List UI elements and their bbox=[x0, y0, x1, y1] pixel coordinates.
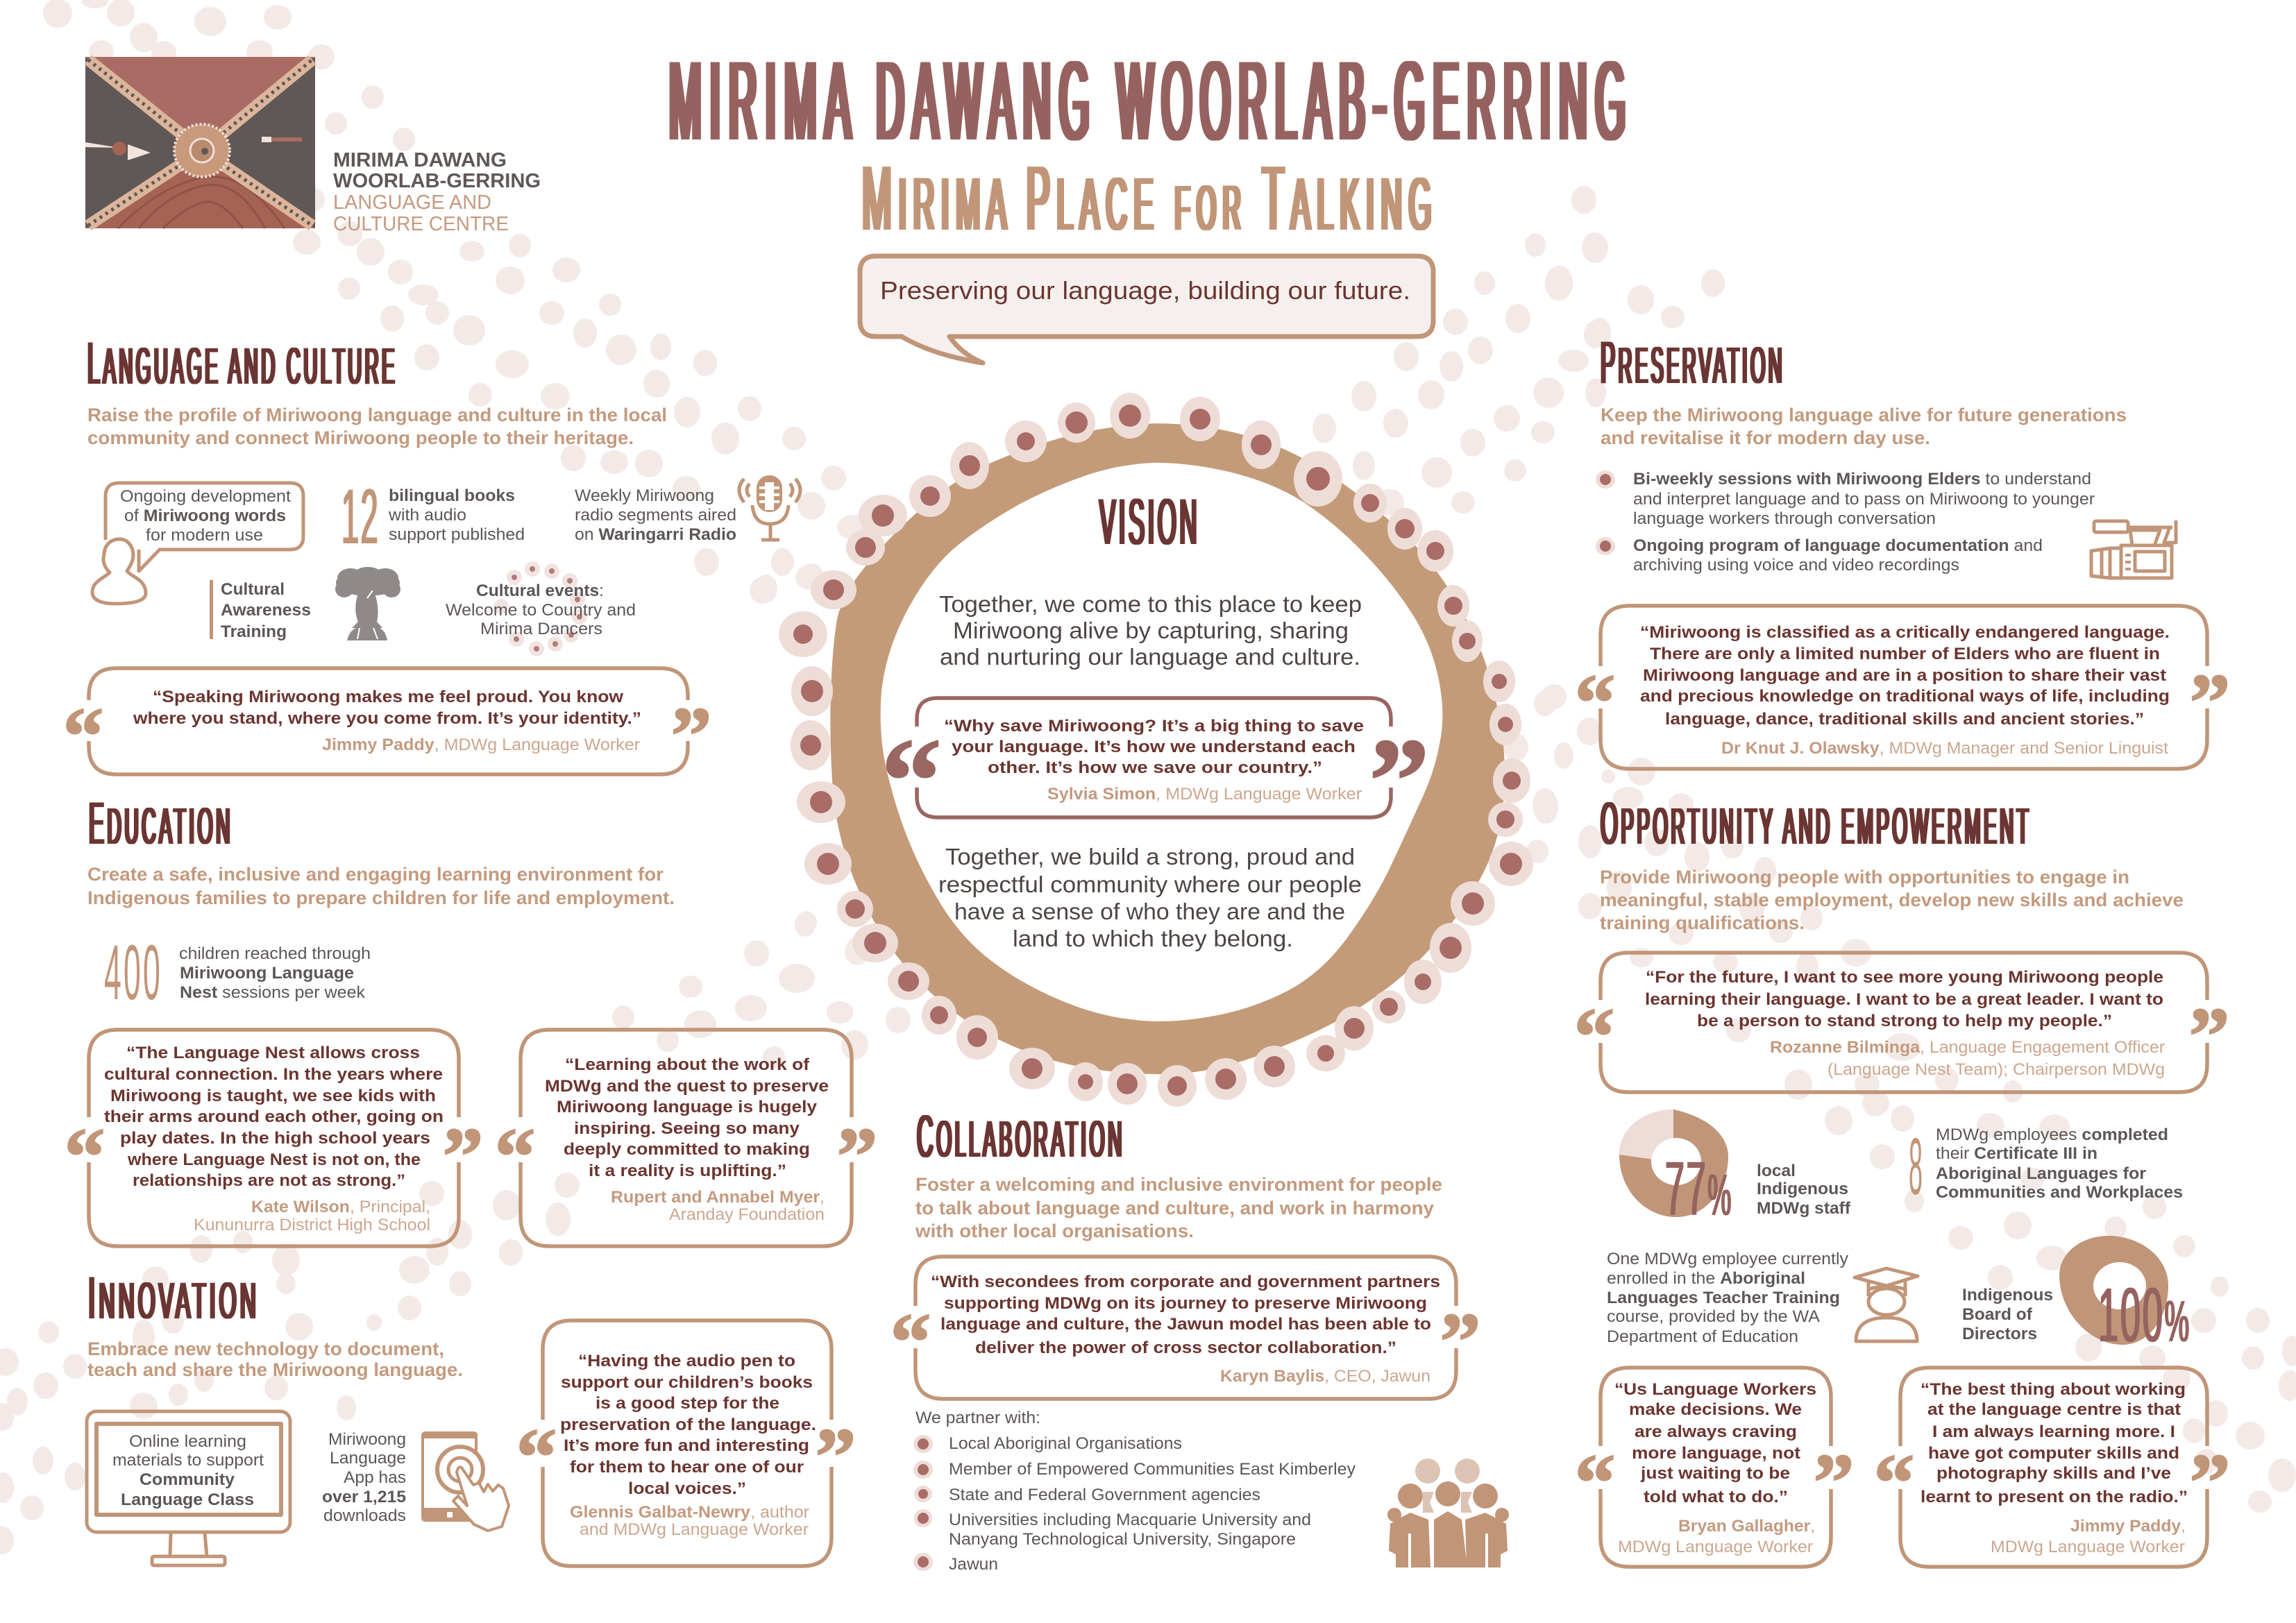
quote: Glennis Galbat-Newry: ” bbox=[815, 1411, 856, 1502]
panel: collaboration: COLLABORATION bbox=[917, 1103, 1125, 1170]
app text: downloads bbox=[323, 1506, 406, 1525]
quote: Kate Wilson: Kununurra District High School bbox=[194, 1216, 430, 1234]
app text: Miriwoong bbox=[328, 1430, 406, 1449]
subtitle: MIRIMA PLACE FOR TALKING bbox=[862, 147, 1438, 249]
stat text: board bbox=[1962, 1286, 2053, 1343]
stat text: board: Directors bbox=[1962, 1325, 2037, 1343]
bullet list bbox=[1596, 470, 2095, 575]
quote: Bryan Gallagher: “Us Language Workers bbox=[1614, 1380, 1816, 1399]
vision statement one: and nurturing our language and culture. bbox=[940, 644, 1360, 670]
vision quote: your language. It’s how we understand each bbox=[952, 738, 1356, 756]
donut chart: 100%: 100% bbox=[2098, 1273, 2191, 1358]
quote: Jimmy Paddy: where you stand, where you come from. It’s your identity.” bbox=[133, 709, 641, 728]
vision statement two: Together, we build a strong, proud and bbox=[945, 844, 1355, 869]
quote: Kate Wilson: relationships are not as strong.” bbox=[133, 1171, 405, 1190]
quote: Rupert and Annabel Myer: Miriwoong language is hugely bbox=[557, 1098, 818, 1116]
quote: Karyn Baylis: ” bbox=[1440, 1296, 1481, 1387]
cultural awareness training: Awareness bbox=[221, 601, 311, 620]
quote: Glennis Galbat-Newry: support our children’s books bbox=[561, 1373, 813, 1392]
quote: Dr Knut J. Olawsky bbox=[1574, 606, 2231, 769]
donut chart: 77% bbox=[1619, 1110, 1733, 1232]
quote: Jimmy Paddy: I am always learning more. I bbox=[1932, 1422, 2175, 1441]
quote: Jimmy Paddy: learnt to present on the radio.” bbox=[1921, 1488, 2188, 1506]
aim: Provide Miriwoong people with opportunities to engage in bbox=[1600, 867, 2129, 887]
panel: preservation bbox=[1574, 330, 2231, 769]
aim bbox=[87, 1339, 463, 1380]
quote: Dr Knut J. Olawsky: Dr Knut J. Olawsky , MDWg Manager and Senior Linguist bbox=[1721, 739, 2168, 758]
stat text: Miriwoong Language bbox=[180, 964, 354, 983]
stat text: staff bbox=[1757, 1162, 1851, 1218]
partner list: We partner with: bbox=[915, 1409, 1040, 1427]
aim bbox=[87, 864, 675, 908]
teacher training text: One MDWg employee currently bbox=[1607, 1250, 1848, 1268]
partner list: State and Federal Government agencies bbox=[949, 1486, 1260, 1504]
quote: Kate Wilson: “ bbox=[64, 1111, 105, 1202]
panel: opportunity and empowerment: 8 bbox=[1909, 1121, 1923, 1212]
aim: to talk about language and culture, and work in harmony bbox=[915, 1198, 1434, 1218]
bullet list: archiving using voice and video recordings bbox=[1633, 556, 1959, 575]
teacher training text: Languages Teacher Training bbox=[1607, 1289, 1840, 1307]
quote: Jimmy Paddy: have got computer skills and bbox=[1928, 1444, 2179, 1463]
quote: Rupert and Annabel Myer: it a reality is uplifting.” bbox=[589, 1162, 786, 1180]
quote: Karyn Baylis: “With secondees from corporate and government partners bbox=[931, 1273, 1440, 1291]
aim: meaningful, stable employment, develop new skills and achieve bbox=[1600, 890, 2184, 910]
icon: graduate bbox=[1855, 1268, 1918, 1341]
tagline speech bubble bbox=[860, 256, 1433, 363]
stat text: books: bilingual books bbox=[389, 486, 515, 505]
aim bbox=[87, 405, 667, 448]
quote: Bryan Gallagher: told what to do.” bbox=[1644, 1488, 1788, 1506]
quote: Dr Knut J. Olawsky: There are only a limited number of Elders who are fluent in bbox=[1650, 645, 2160, 663]
quote: Kate Wilson: ” bbox=[443, 1111, 483, 1202]
vision statement two bbox=[938, 844, 1362, 951]
teacher training text: enrolled in the Aboriginal bbox=[1607, 1269, 1805, 1288]
quote: Dr Knut J. Olawsky: language, dance, traditional skills and ancient stories.” bbox=[1665, 710, 2144, 729]
quote: Rozanne Bilminga bbox=[1574, 953, 2229, 1092]
icon: group of people bbox=[1387, 1459, 1509, 1567]
panel: innovation: INNOVATION bbox=[88, 1265, 260, 1332]
quote: Glennis Galbat-Newry: and MDWg Language Worker bbox=[580, 1520, 809, 1539]
quote: Jimmy Paddy bbox=[1874, 1368, 2231, 1567]
cultural events: Cultural events: bbox=[476, 581, 604, 600]
vision statement two: land to which they belong. bbox=[1013, 926, 1293, 951]
vision statement two: respectful community where our people bbox=[938, 872, 1362, 897]
quote: Bryan Gallagher bbox=[1574, 1368, 1855, 1567]
aim: Embrace new technology to document, bbox=[87, 1339, 444, 1359]
quote: Kate Wilson bbox=[64, 1030, 483, 1246]
logo bbox=[85, 57, 315, 228]
quote: Dr Knut J. Olawsky: and precious knowledge on traditional ways of life, including bbox=[1640, 687, 2170, 706]
panel: language and culture: LANGUAGE AND CULTURE bbox=[87, 330, 398, 397]
quote: Glennis Galbat-Newry: It’s more fun and interesting bbox=[564, 1436, 809, 1455]
stat text bbox=[179, 944, 371, 1002]
aim bbox=[1601, 405, 2127, 448]
stat text: board: Indigenous bbox=[1962, 1286, 2053, 1305]
icon: microphone bbox=[739, 475, 800, 540]
aim: Raise the profile of Miriwoong language and culture in the local bbox=[87, 405, 667, 425]
quote: Bryan Gallagher: Bryan Gallagher, bbox=[1678, 1517, 1815, 1536]
radio text bbox=[575, 486, 736, 544]
aim bbox=[1600, 867, 2184, 933]
radio text: radio segments aired bbox=[575, 506, 736, 525]
bullet list: and interpret language and to pass on Miriwoong to younger bbox=[1633, 490, 2095, 509]
quote: Dr Knut J. Olawsky: Miriwoong language and are in a position to share their vast bbox=[1643, 666, 2166, 685]
cultural events: Welcome to Country and bbox=[446, 601, 636, 620]
panel: language and culture bbox=[62, 330, 800, 781]
ring bbox=[830, 423, 1505, 1074]
quote: Jimmy Paddy: “ bbox=[62, 690, 104, 781]
quote: Jimmy Paddy: Jimmy Paddy, bbox=[2070, 1517, 2186, 1536]
stat text: children reached through bbox=[179, 944, 371, 963]
quote: Glennis Galbat-Newry bbox=[516, 1320, 856, 1566]
teacher training text bbox=[1607, 1250, 1848, 1346]
quote: Karyn Baylis: supporting MDWg on its journey to preserve Miriwoong bbox=[944, 1294, 1427, 1313]
donut chart: 77%: 77% bbox=[1665, 1146, 1733, 1232]
panel: innovation bbox=[87, 1265, 856, 1566]
quote: Jimmy Paddy: Jimmy Paddy , MDWg Language Worker bbox=[322, 736, 640, 754]
quote: Karyn Baylis: deliver the power of cross sector collaboration.” bbox=[975, 1339, 1396, 1357]
radio text: on Waringarri Radio bbox=[575, 525, 736, 544]
teacher training text: course, provided by the WA bbox=[1607, 1307, 1820, 1326]
quote: Karyn Baylis bbox=[890, 1257, 1481, 1399]
quote: Bryan Gallagher: “ bbox=[1574, 1437, 1616, 1528]
speech bubble: words bbox=[105, 483, 303, 571]
vision statement one: Miriwoong alive by capturing, sharing bbox=[953, 618, 1349, 643]
icon: video camera bbox=[2091, 520, 2176, 578]
aim: teach and share the Miriwoong language. bbox=[87, 1359, 463, 1380]
monitor text bbox=[112, 1432, 264, 1509]
quote: Glennis Galbat-Newry: for them to hear one of our bbox=[570, 1458, 804, 1477]
aim: Foster a welcoming and inclusive environment for people bbox=[915, 1174, 1442, 1195]
app text bbox=[322, 1430, 406, 1525]
cultural awareness training: Training bbox=[221, 622, 287, 641]
partner list: Jawun bbox=[949, 1555, 998, 1574]
quote: Karyn Baylis: language and culture, the Jawun model has been able to bbox=[940, 1315, 1431, 1334]
quote: Rupert and Annabel Myer: inspiring. Seeing so many bbox=[574, 1119, 800, 1138]
quote: Rozanne Bilminga: “ bbox=[1574, 991, 1614, 1082]
logo text: CULTURE CENTRE bbox=[333, 213, 509, 235]
vision quote: other. It’s how we save our country.” bbox=[988, 758, 1322, 777]
icon: boab tree bbox=[335, 567, 400, 640]
aim: Indigenous families to prepare children for life and employment. bbox=[87, 887, 675, 908]
icon: phone and hand bbox=[421, 1431, 509, 1531]
app text: Language bbox=[330, 1449, 406, 1468]
quote: Kate Wilson: Kate Wilson, Principal, bbox=[251, 1198, 430, 1216]
partner list: Local Aboriginal Organisations bbox=[949, 1434, 1182, 1453]
bullet list: Bi-weekly sessions with Miriwoong Elders to understand bbox=[1633, 470, 2091, 488]
quote: Bryan Gallagher: just waiting to be bbox=[1640, 1464, 1790, 1483]
quote: Kate Wilson: their arms around each other, going on bbox=[104, 1107, 444, 1126]
bullet list: language workers through conversation bbox=[1633, 509, 1936, 528]
panel: preservation: PRESERVATION bbox=[1601, 330, 1785, 396]
quote: Rozanne Bilminga: “For the future, I want to see more young Miriwoong people bbox=[1646, 968, 2163, 987]
donut chart: 100% bbox=[2059, 1236, 2191, 1358]
quote: Kate Wilson: Miriwoong is taught, we see kids with bbox=[110, 1087, 436, 1105]
quote: Glennis Galbat-Newry: Glennis Galbat-Newry , author bbox=[570, 1503, 809, 1522]
partner list: Universities including Macquarie University and bbox=[949, 1511, 1311, 1529]
quote: Kate Wilson: “The Language Nest allows cross bbox=[126, 1044, 420, 1062]
quote: Kate Wilson: cultural connection. In the years where bbox=[104, 1065, 443, 1084]
monitor text: Language Class bbox=[121, 1490, 254, 1509]
speech bubble: words: for modern use bbox=[146, 526, 263, 545]
logo text: WOORLAB-GERRING bbox=[333, 170, 541, 192]
quote: Rozanne Bilminga: learning their language. I want to be a great leader. I want to bbox=[1645, 990, 2163, 1009]
app text: App has bbox=[344, 1468, 406, 1487]
quote: Bryan Gallagher: are always craving bbox=[1635, 1422, 1797, 1441]
quote: Jimmy Paddy: photography skills and I’ve bbox=[1936, 1464, 2171, 1483]
aim: and revitalise it for modern day use. bbox=[1601, 427, 1930, 448]
logo text: MIRIMA DAWANG bbox=[333, 149, 507, 171]
quote: Bryan Gallagher: MDWg Language Worker bbox=[1618, 1538, 1813, 1556]
quote: Rozanne Bilminga: ” bbox=[2189, 991, 2229, 1082]
cultural awareness training bbox=[210, 580, 311, 641]
vision statement one: Together, we come to this place to keep bbox=[939, 591, 1362, 617]
bullet list: Ongoing program of language documentation and bbox=[1633, 536, 2043, 555]
quote: Rozanne Bilminga: (Language Nest Team); Chairperson MDWg bbox=[1827, 1060, 2165, 1079]
vision quote: ” bbox=[1369, 713, 1430, 848]
stat text: books: support published bbox=[389, 525, 525, 544]
partner list bbox=[913, 1409, 1356, 1574]
aim: with other local organisations. bbox=[915, 1221, 1194, 1241]
stat text: staff: Indigenous bbox=[1757, 1180, 1848, 1198]
quote: Jimmy Paddy: ” bbox=[2189, 1437, 2231, 1528]
monitor text: materials to support bbox=[112, 1451, 264, 1470]
panel: education bbox=[64, 790, 877, 1246]
quote: Karyn Baylis: Karyn Baylis, CEO, Jawun bbox=[1220, 1367, 1430, 1386]
quote: Rupert and Annabel Myer: deeply committed to making bbox=[564, 1140, 810, 1159]
radio text: Weekly Miriwoong bbox=[575, 486, 714, 505]
quote: Kate Wilson: play dates. In the high school years bbox=[120, 1129, 430, 1148]
ring dots bbox=[779, 393, 1533, 1107]
stat text: certificate: their Certificate III in bbox=[1936, 1144, 2097, 1163]
panel: vision ring bbox=[779, 393, 1533, 1107]
quote: Rupert and Annabel Myer: ” bbox=[837, 1111, 877, 1202]
logo text bbox=[333, 149, 541, 235]
stat text: staff: local bbox=[1757, 1162, 1796, 1180]
quote: Glennis Galbat-Newry: is a good step for the bbox=[596, 1394, 779, 1413]
quote: Jimmy Paddy bbox=[62, 668, 712, 781]
stat text: books bbox=[388, 486, 525, 544]
vision statement two: have a sense of who they are and the bbox=[954, 899, 1345, 924]
quote: Glennis Galbat-Newry: “ bbox=[516, 1411, 557, 1502]
aim bbox=[915, 1174, 1442, 1241]
vision statement one bbox=[939, 591, 1362, 670]
vision quote bbox=[881, 698, 1430, 848]
stat text: staff: MDWg staff bbox=[1757, 1199, 1851, 1218]
quote: Glennis Galbat-Newry: preservation of the language. bbox=[560, 1416, 816, 1434]
dot circle bbox=[493, 561, 587, 656]
stat text: board: Board of bbox=[1962, 1305, 2033, 1324]
quote: Jimmy Paddy: at the language centre is that bbox=[1927, 1400, 2181, 1419]
stat text: certificate: Communities and Workplaces bbox=[1936, 1183, 2183, 1202]
aim: community and connect Miriwoong people to their heritage. bbox=[87, 427, 634, 448]
monitor text: Online learning bbox=[129, 1432, 246, 1451]
quote: Rupert and Annabel Myer: Aranday Foundation bbox=[669, 1205, 825, 1224]
cultural awareness training: Cultural bbox=[221, 580, 285, 599]
quote: Dr Knut J. Olawsky: “Miriwoong is classified as a critically endangered language. bbox=[1640, 623, 2170, 642]
stat text: certificate: MDWg employees completed bbox=[1936, 1125, 2168, 1144]
panel: vision ring: VISION bbox=[1099, 485, 1200, 558]
cultural events: Mirima Dancers bbox=[480, 620, 602, 638]
stat text: certificate bbox=[1936, 1125, 2183, 1202]
aim: training qualifications. bbox=[1600, 912, 1805, 933]
vision quote: Sylvia Simon , MDWg Language Worker bbox=[1047, 785, 1362, 804]
panel: opportunity and empowerment bbox=[1574, 790, 2231, 1567]
speech bubble: words: of Miriwoong words bbox=[124, 507, 286, 525]
quote: Jimmy Paddy: “Speaking Miriwoong makes me feel proud. You know bbox=[153, 688, 623, 706]
icon: person bbox=[92, 539, 146, 604]
cultural events bbox=[446, 561, 636, 656]
quote: Rozanne Bilminga: be a person to stand strong to help my people.” bbox=[1697, 1012, 2112, 1030]
quote: Glennis Galbat-Newry: “Having the audio pen to bbox=[578, 1352, 795, 1370]
monitor text: Community bbox=[140, 1470, 235, 1489]
quote: Kate Wilson: where Language Nest is not on, the bbox=[127, 1150, 421, 1169]
quote: Bryan Gallagher: make decisions. We bbox=[1629, 1400, 1802, 1419]
aim: Keep the Miriwoong language alive for future generations bbox=[1601, 405, 2127, 425]
quote: Jimmy Paddy: “The best thing about working bbox=[1921, 1380, 2186, 1399]
speech bubble: words: Ongoing development bbox=[120, 487, 291, 506]
vision quote: “ bbox=[881, 713, 942, 848]
quote: Bryan Gallagher: ” bbox=[1813, 1437, 1855, 1528]
stat text: books: with audio bbox=[388, 506, 466, 525]
quote: Karyn Baylis: “ bbox=[890, 1296, 931, 1387]
quote: Rupert and Annabel Myer bbox=[494, 1030, 877, 1246]
panel: education: EDUCATION bbox=[89, 790, 233, 857]
panel: collaboration bbox=[890, 1103, 1509, 1574]
vision quote: “Why save Miriwoong? It’s a big thing to save bbox=[944, 717, 1364, 736]
app text: over 1,215 bbox=[322, 1488, 406, 1506]
quote: Rozanne Bilminga: Rozanne Bilminga , Language Engagement Officer bbox=[1770, 1038, 2165, 1057]
quote: Jimmy Paddy: MDWg Language Worker bbox=[1991, 1538, 2185, 1556]
quote: Dr Knut J. Olawsky: ” bbox=[2189, 657, 2231, 748]
aim: Create a safe, inclusive and engaging learning environment for bbox=[87, 864, 664, 885]
quote: Jimmy Paddy: ” bbox=[670, 690, 712, 781]
quote: Rupert and Annabel Myer: MDWg and the quest to preserve bbox=[545, 1077, 829, 1096]
logo text: LANGUAGE AND bbox=[333, 192, 491, 214]
partner list: Member of Empowered Communities East Kimberley bbox=[949, 1460, 1356, 1479]
quote: Jimmy Paddy: “ bbox=[1874, 1437, 1914, 1528]
icon: monitor bbox=[87, 1411, 290, 1565]
quote: Glennis Galbat-Newry: local voices.” bbox=[628, 1479, 746, 1498]
stat text: certificate: Aboriginal Languages for bbox=[1936, 1164, 2146, 1183]
partner list: Nanyang Technological University, Singapore bbox=[949, 1530, 1296, 1549]
teacher training text: Department of Education bbox=[1607, 1327, 1798, 1346]
panel: language and culture: 12 bbox=[341, 473, 380, 560]
tagline speech bubble: Preserving our language, building our future. bbox=[880, 276, 1410, 305]
panel: education: 400 bbox=[104, 929, 162, 1016]
quote: Rupert and Annabel Myer: “Learning about the work of bbox=[565, 1055, 810, 1074]
stat text: Nest sessions per week bbox=[180, 983, 366, 1002]
quote: Rupert and Annabel Myer: Rupert and Annabel Myer , bbox=[611, 1188, 825, 1207]
quote: Rupert and Annabel Myer: “ bbox=[494, 1111, 536, 1202]
quote: Dr Knut J. Olawsky: “ bbox=[1574, 657, 1616, 748]
quote: Bryan Gallagher: more language, not bbox=[1632, 1444, 1800, 1463]
